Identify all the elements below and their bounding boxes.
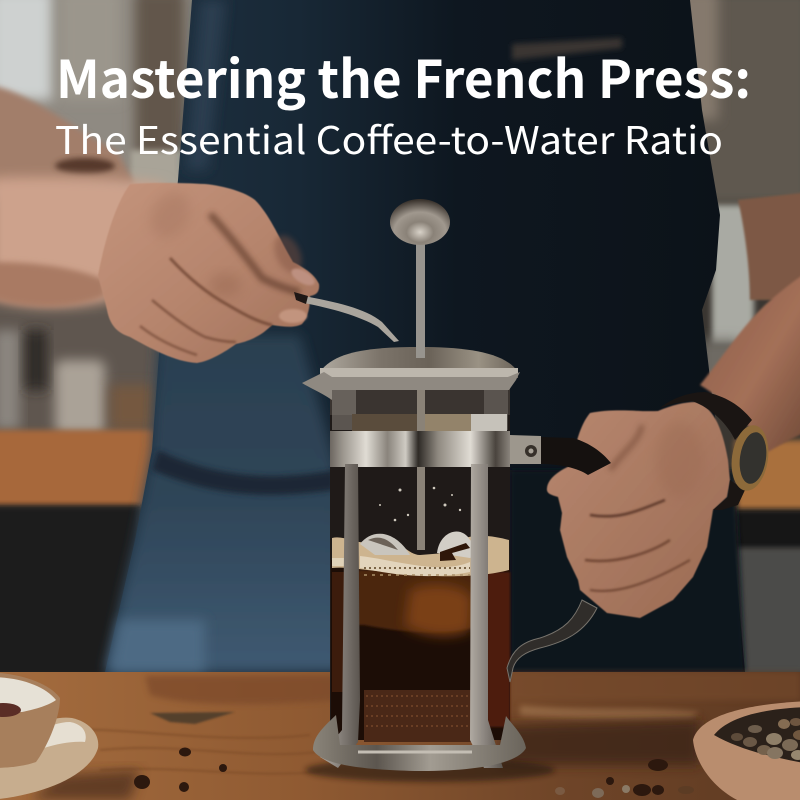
finger shadows [210,214,300,292]
right arm and hand [547,192,800,618]
handle bracket and grip [540,437,611,475]
counter right [735,440,800,510]
foam layer [332,536,509,576]
coffee liquid [331,560,510,740]
coffee grounds [364,690,472,742]
wooden table [0,672,800,800]
counter left [0,430,165,506]
forearm [0,177,165,307]
spoon held by the left hand [294,292,399,342]
french press [302,199,611,782]
lid [320,347,518,378]
glass beaker [330,380,510,740]
metal band [330,431,510,467]
bowl [0,672,60,768]
upper arm [738,192,800,300]
upper arm behind [0,85,135,190]
rim and pour spout [302,372,520,400]
apron [105,0,745,672]
subtitle: The Essential Coffee-to-Water Ratio [55,110,723,165]
scattered coffee beans [134,748,694,798]
metal struts [320,464,360,768]
base ring [313,715,526,771]
fingernails [289,265,317,289]
plunger rod [416,243,425,353]
knuckles [142,185,198,245]
shirt right [690,0,800,205]
saucer [0,718,98,800]
press shadow [305,758,555,782]
left bowl and saucer with ground coffee [0,672,98,800]
glass above the liquid with bubbles [379,487,461,521]
right bowl with coffee beans [693,701,800,800]
finger creases [590,500,665,516]
left arm and hand [0,85,319,363]
wristwatch [660,392,772,510]
forearm [700,270,800,452]
title: Mastering the French Press: [56,38,751,113]
hand [547,402,730,618]
plunger knob [390,199,450,245]
plunger filter seen through glass [352,414,492,432]
hand [98,183,319,363]
